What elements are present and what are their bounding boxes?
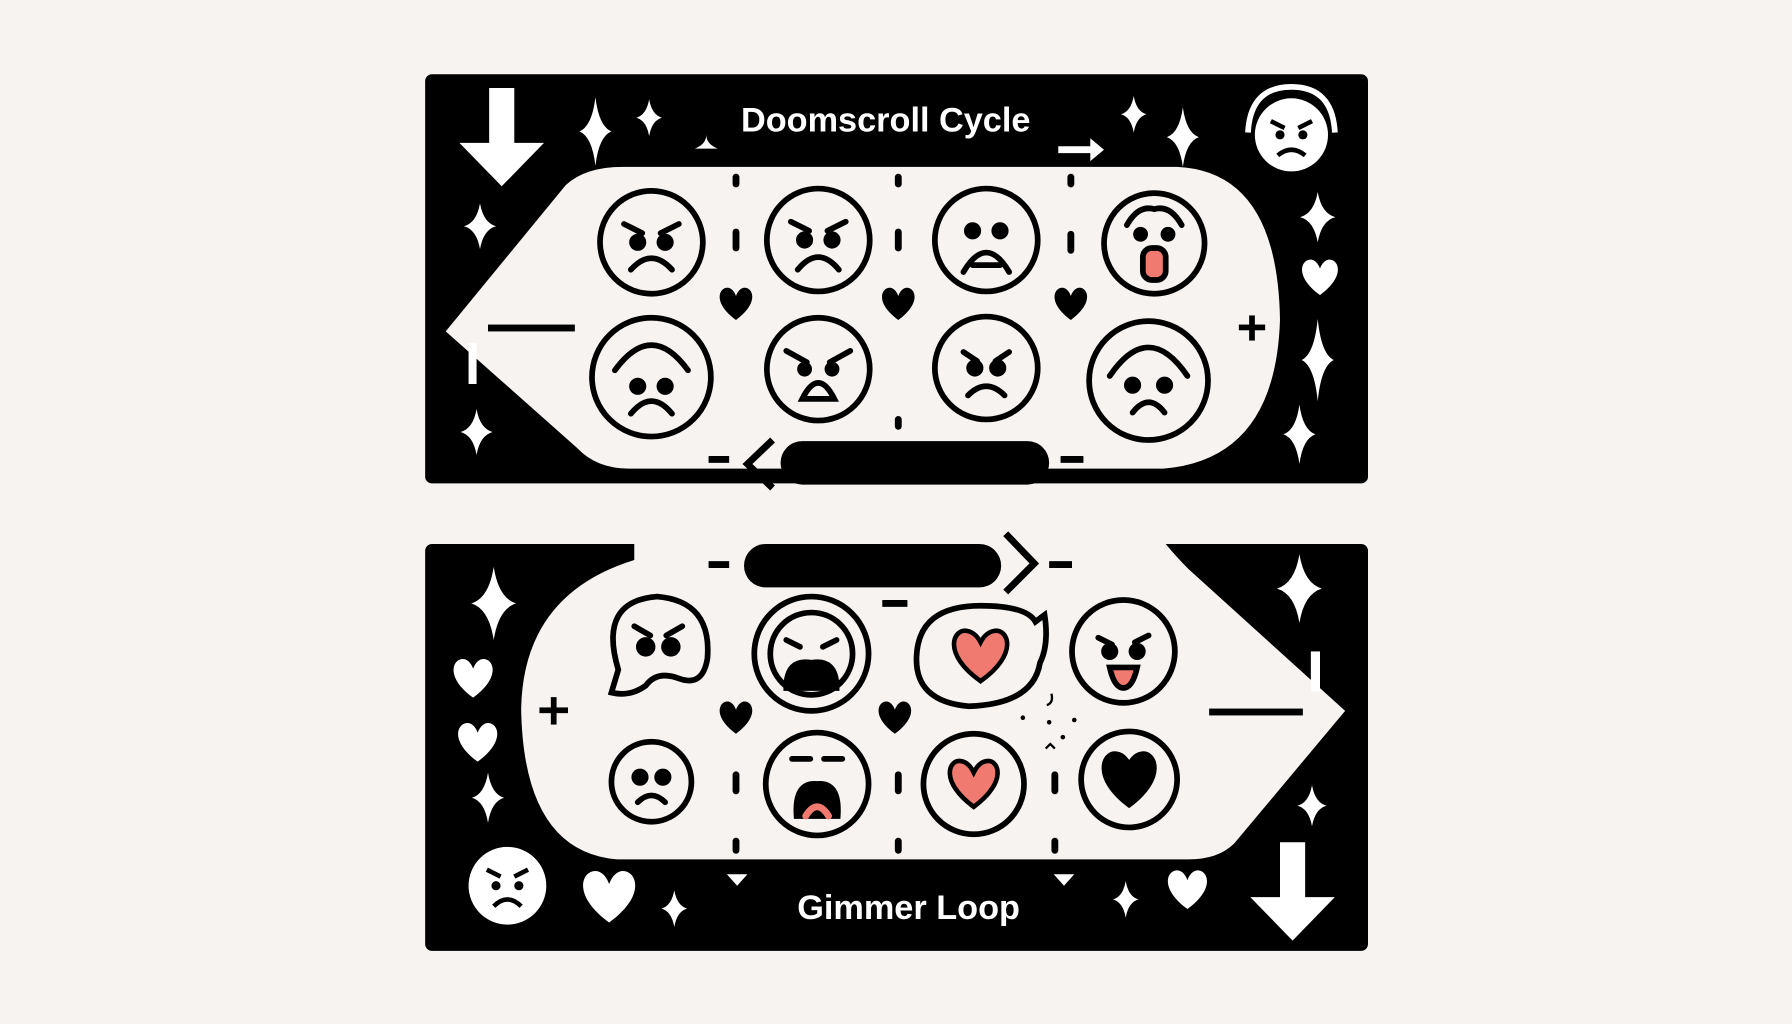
icon: angry face corner — [469, 847, 546, 925]
left-pointing arrow band — [446, 167, 1280, 469]
misc marks — [488, 174, 1265, 430]
top scroll pill — [709, 534, 1072, 607]
panel: gimmer loop — [425, 534, 1368, 951]
title: Gimmer Loop — [797, 889, 1020, 927]
bottom scroll pill — [709, 440, 1083, 488]
sparkle dots — [1021, 694, 1077, 749]
sparkles and hearts — [454, 554, 1326, 927]
icon: down arrow — [459, 88, 544, 186]
faces row 2 — [611, 731, 1177, 835]
panel: doomscroll cycle — [425, 74, 1368, 488]
misc marks — [539, 697, 1303, 854]
sparkles — [461, 96, 1338, 464]
icon: angry face corner — [1248, 87, 1335, 171]
icon: down arrow — [1250, 842, 1335, 941]
title: Doomscroll Cycle — [741, 101, 1030, 139]
right-pointing arrow band — [521, 544, 1345, 859]
faces row 1 — [611, 597, 1175, 711]
faces row 1 — [600, 189, 1205, 294]
faces row 2 — [592, 317, 1208, 440]
